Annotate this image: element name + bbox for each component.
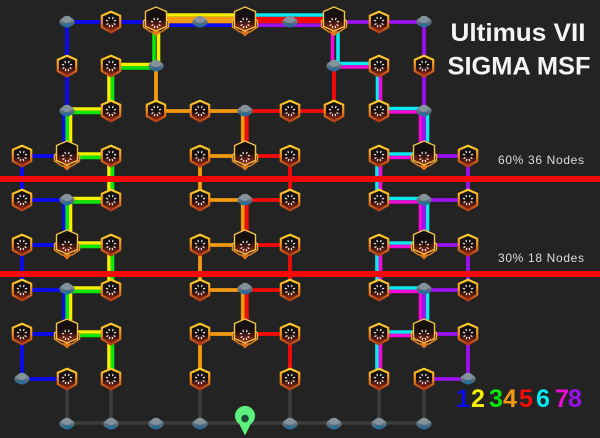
icon: green location pin	[235, 406, 255, 435]
path 6: cyan	[245, 15, 428, 379]
legend: path numbers: 6	[536, 385, 550, 413]
large shield nodes	[54, 7, 436, 348]
legend: path numbers: 8	[568, 385, 582, 413]
path 3: green	[67, 22, 156, 379]
shield nodes	[13, 12, 477, 389]
title: Ultimus VII	[450, 19, 586, 47]
threshold line: 60%	[0, 176, 600, 182]
grey locked paths	[67, 379, 424, 423]
legend: path numbers: 1	[456, 385, 470, 413]
path 7: magenta	[332, 22, 424, 379]
path 1: blue	[22, 22, 245, 379]
legend: path numbers: 5	[519, 385, 533, 413]
title	[448, 19, 590, 80]
legend: path numbers: 3	[489, 385, 503, 413]
rock nodes	[14, 16, 476, 429]
legend: path numbers: 7	[555, 385, 569, 413]
title: SIGMA MSF	[448, 52, 590, 80]
path 8: purple	[245, 22, 468, 379]
path 5: red	[245, 20, 334, 379]
legend: path numbers	[456, 385, 582, 413]
label: 30% threshold: 30% 18 Nodes	[498, 251, 584, 265]
legend: path numbers: 2	[471, 385, 485, 413]
path 2: yellow	[67, 15, 245, 379]
path 4: orange	[156, 20, 245, 379]
legend: path numbers: 4	[503, 385, 517, 413]
label: 60% threshold: 60% 36 Nodes	[498, 153, 584, 167]
threshold line: 30%	[0, 271, 600, 277]
